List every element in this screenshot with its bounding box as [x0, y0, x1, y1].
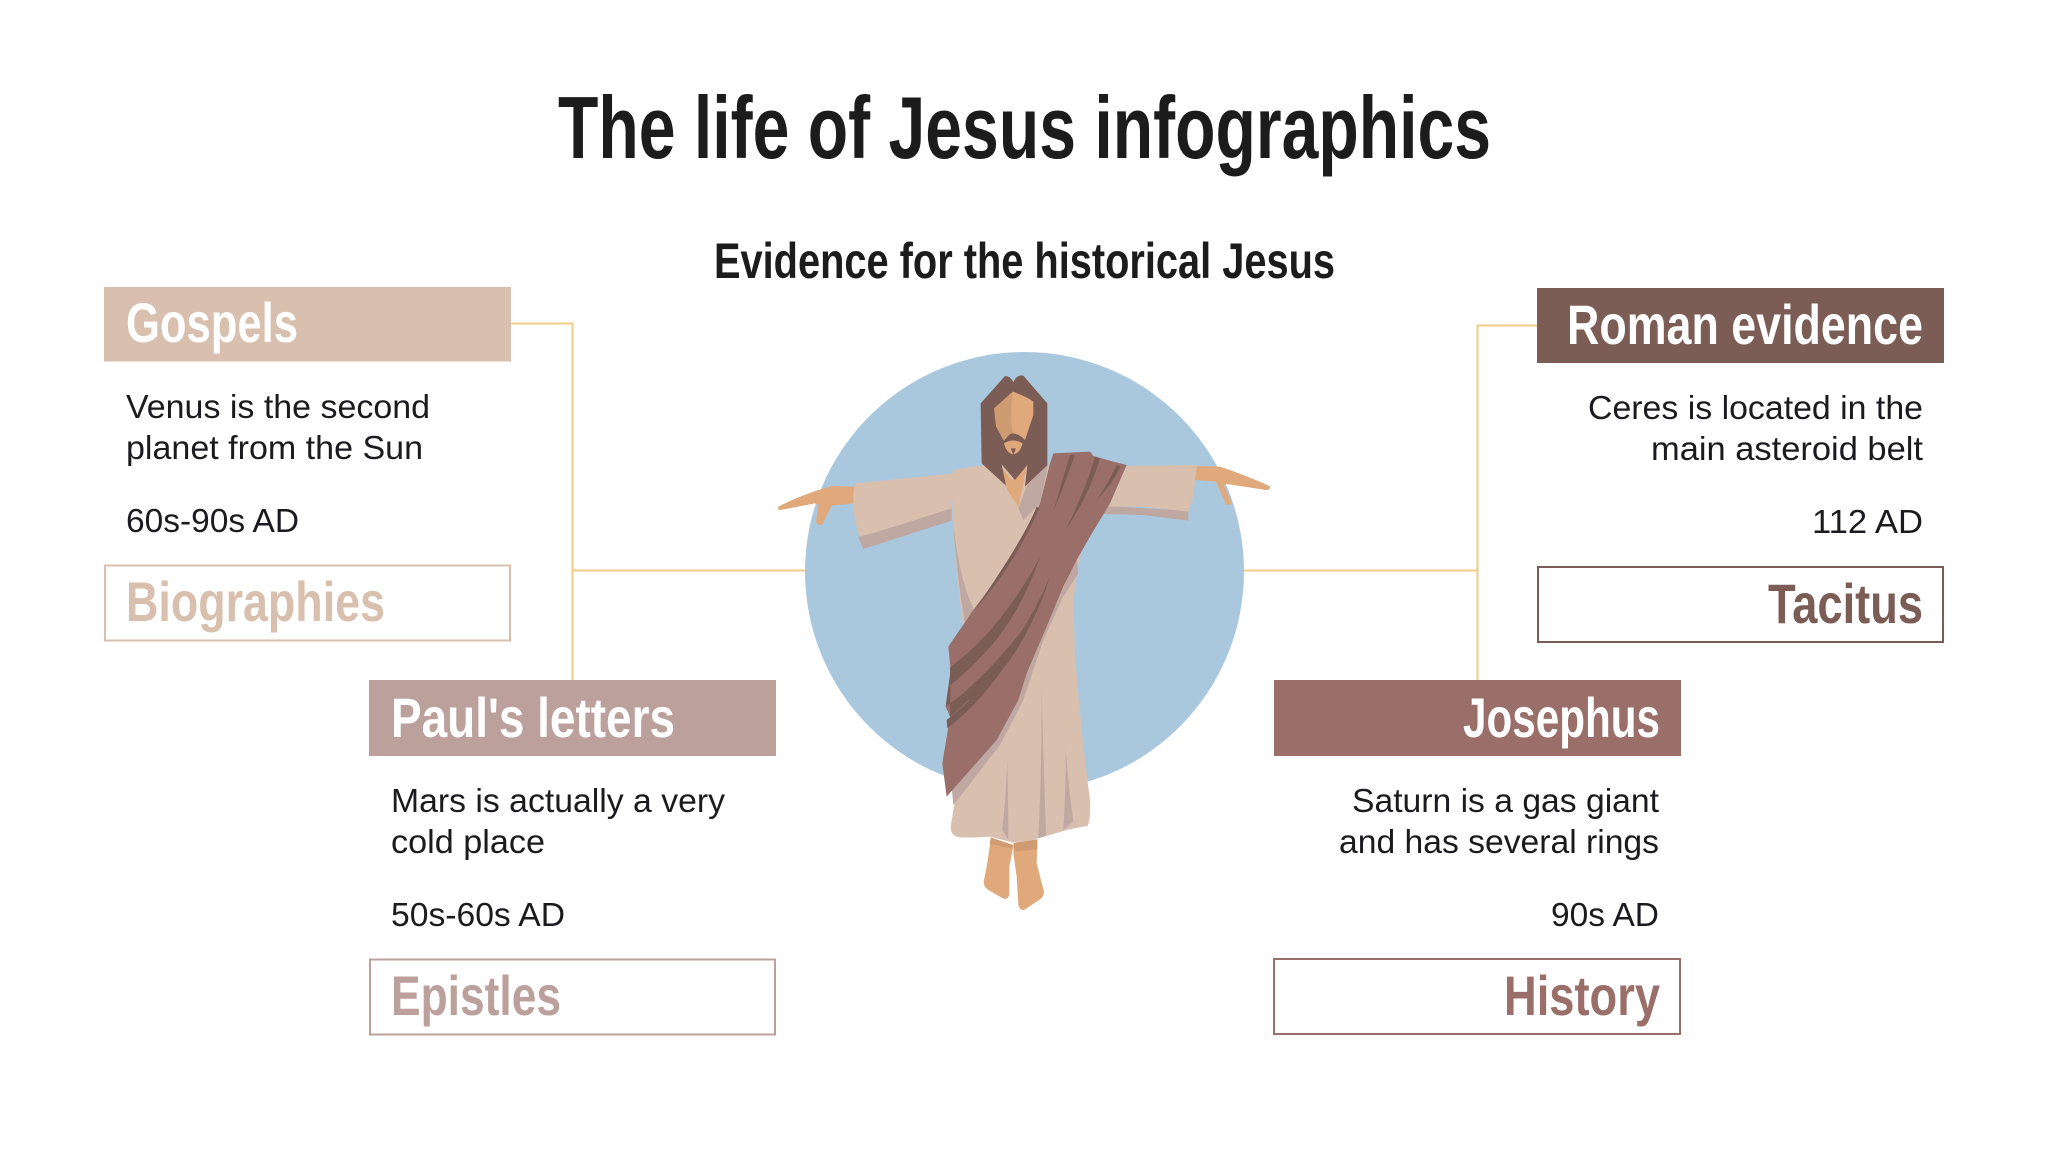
Gospels header: Gospels: [126, 291, 298, 354]
Josephus description: [1339, 782, 1659, 860]
Josephus description: Saturn is a gas giant: [1352, 782, 1659, 819]
illustration: Jesus figure: [778, 375, 1270, 910]
Roman evidence description: [1588, 389, 1923, 467]
panel: Josephus: [1274, 680, 1681, 1034]
face: [994, 392, 1033, 455]
Epistles tag: Epistles: [391, 964, 561, 1027]
Josephus header: [1274, 680, 1681, 756]
History tag: History: [1504, 964, 1660, 1027]
Gospels date: 60s-90s AD: [126, 502, 299, 539]
Roman evidence header: Roman evidence: [1567, 293, 1923, 356]
Josephus date: 90s AD: [1551, 896, 1659, 933]
right sleeve: [1103, 465, 1197, 521]
Roman evidence description: main asteroid belt: [1651, 430, 1923, 467]
Gospels header: [104, 287, 511, 362]
Gospels description: Venus is the second: [126, 388, 430, 425]
Tacitus tag: [1538, 567, 1943, 642]
right foot: [1013, 839, 1044, 910]
blue circle: [805, 352, 1244, 791]
Tacitus tag: Tacitus: [1768, 572, 1923, 635]
Roman evidence header: [1537, 288, 1944, 363]
Paul's letters description: [391, 782, 725, 860]
subtitle: Evidence for the historical Jesus: [714, 233, 1335, 289]
Josephus header: Josephus: [1463, 686, 1660, 749]
right hand: [1195, 466, 1270, 505]
sash: [942, 452, 1127, 797]
left hand: [778, 486, 855, 525]
Gospels description: planet from the Sun: [126, 429, 423, 466]
Gospels description: [126, 388, 430, 466]
History tag: [1274, 959, 1680, 1034]
Josephus description: and has several rings: [1339, 823, 1659, 860]
collar: [1018, 463, 1048, 520]
Paul's letters date: 50s-60s AD: [391, 896, 565, 933]
Biographies tag: Biographies: [126, 570, 385, 633]
connector lines: [511, 324, 1537, 680]
hair and beard: [981, 375, 1047, 487]
panel: Roman evidence: [1537, 288, 1944, 642]
left sleeve: [853, 473, 955, 549]
Roman evidence description: Ceres is located in the: [1588, 389, 1923, 426]
panel: Paul's letters: [369, 680, 776, 1034]
robe: [951, 466, 1093, 843]
neck: [1000, 465, 1027, 507]
Biographies tag: [105, 566, 510, 640]
Epistles tag: [370, 960, 775, 1034]
title: The life of Jesus infographics: [558, 78, 1491, 177]
Paul's letters description: Mars is actually a very: [391, 782, 725, 819]
Paul's letters description: cold place: [391, 823, 545, 860]
left foot: [984, 837, 1013, 899]
Roman evidence date: 112 AD: [1812, 503, 1923, 540]
panel: Gospels: [104, 287, 511, 640]
Paul's letters header: Paul's letters: [391, 686, 675, 749]
